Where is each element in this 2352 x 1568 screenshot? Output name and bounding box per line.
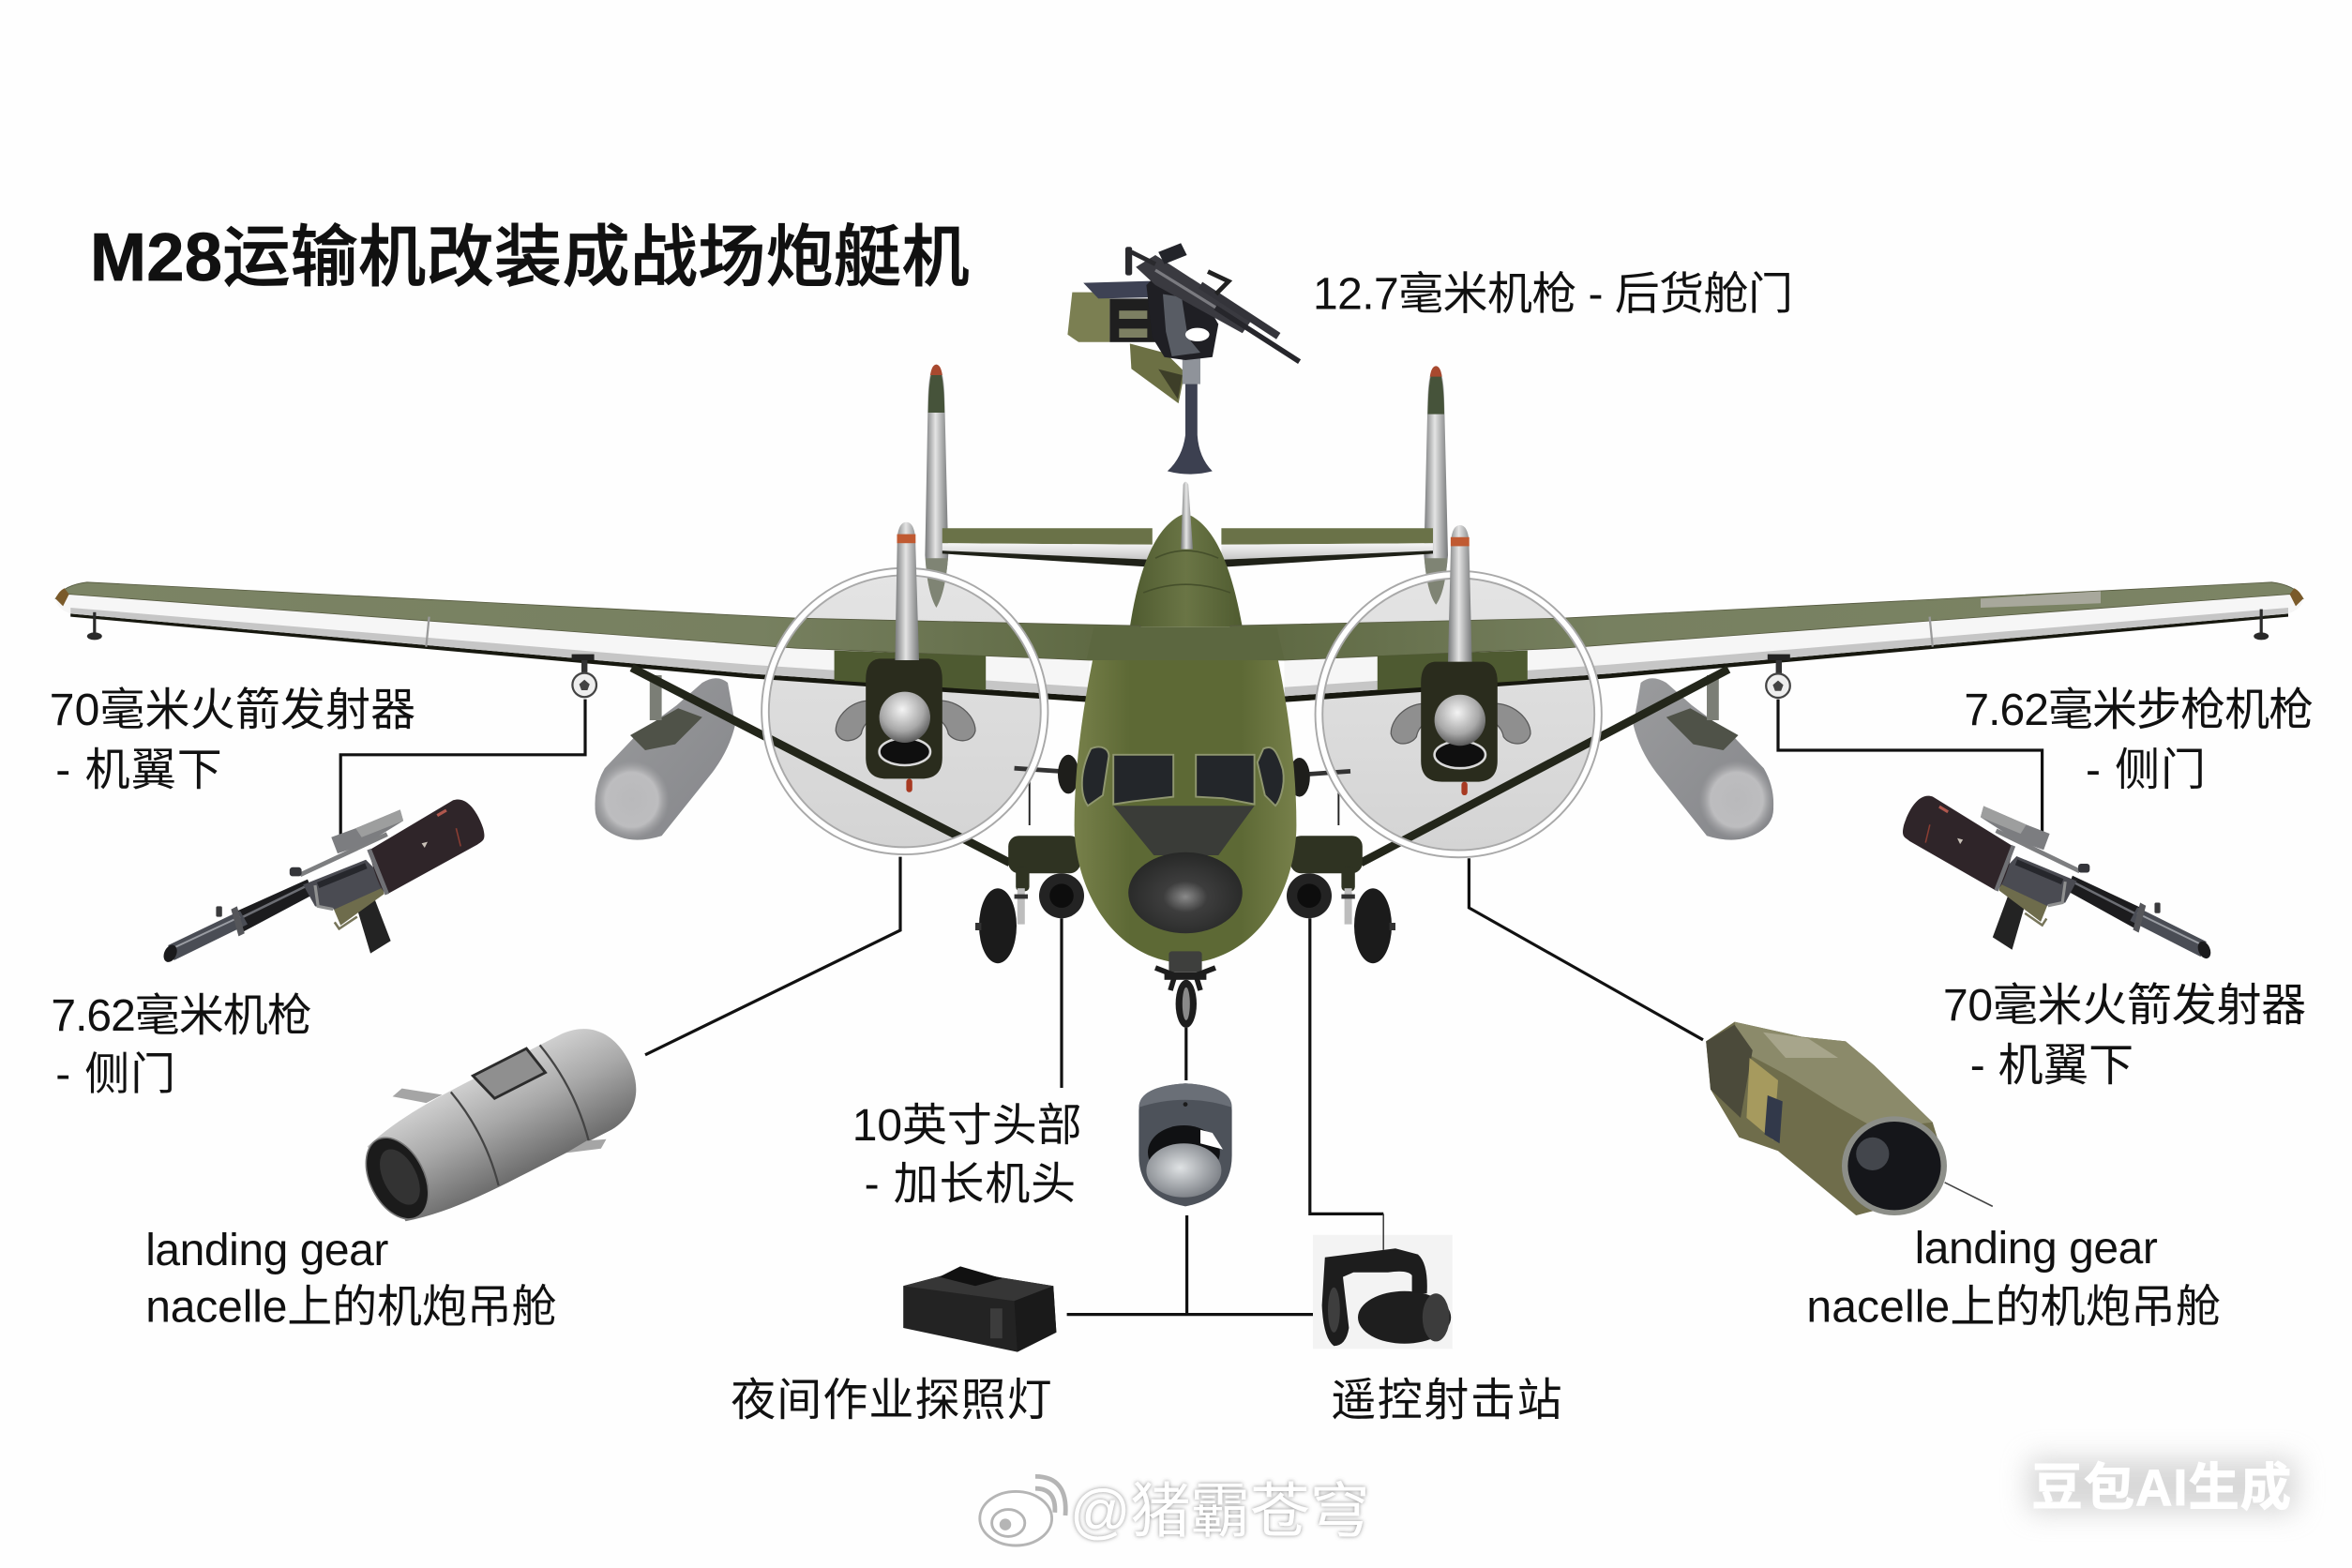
twin tail fins <box>925 365 1448 608</box>
label: right rocket launcher: - 机翼下 <box>1970 1041 2133 1091</box>
watermark: weibo: @猪霸苍穹 <box>1070 1478 1370 1545</box>
label: right 7.62mm gun: - 侧门 <box>2086 746 2206 795</box>
wing struts <box>632 668 1728 863</box>
icon: right launcher <box>1903 796 2213 960</box>
dorsal fin <box>1181 482 1193 550</box>
icon: left launcher <box>161 799 484 964</box>
propeller disc left <box>767 573 1043 850</box>
label: right rocket launcher: 70毫米火箭发射器 <box>1943 981 2306 1031</box>
main fuselage <box>1075 655 1296 963</box>
label: left landing gear pod: nacelle上的机炮吊舱 <box>145 1283 557 1333</box>
label: nose turret: 10英寸头部 <box>852 1101 1082 1151</box>
horizontal stabilizer <box>942 528 1433 567</box>
label: searchlight: 夜间作业探照灯 <box>731 1376 1052 1425</box>
icon: night searchlight <box>903 1266 1056 1352</box>
label: right landing gear pod: nacelle上的机炮吊舱 <box>1806 1283 2221 1333</box>
label: right 7.62mm gun <box>1964 686 2314 795</box>
label: remote weapon station: 遥控射击站 <box>1331 1376 1562 1425</box>
nose gear <box>1155 951 1215 1028</box>
label: left landing gear pod: landing gear <box>145 1226 388 1275</box>
label: right landing gear pod <box>1806 1224 2221 1333</box>
aircraft <box>55 365 2303 1028</box>
engine upper fin right <box>1448 525 1472 662</box>
radome <box>1128 852 1243 933</box>
label: left rocket launcher <box>50 686 415 795</box>
label: left 7.62mm gun <box>51 991 312 1100</box>
label: left landing gear pod <box>145 1226 557 1333</box>
icon: right camouflaged gun pod <box>1706 1022 1993 1215</box>
rear fuselage hump <box>1130 513 1243 627</box>
right wing <box>1230 582 2303 702</box>
label: nose turret <box>852 1101 1082 1209</box>
watermark: AI label: 豆包AI生成 <box>2031 1459 2291 1516</box>
label: left 7.62mm gun: - 侧门 <box>55 1050 175 1100</box>
label: nose turret: - 加长机头 <box>865 1159 1076 1209</box>
wingtip stands <box>87 610 2269 640</box>
underwing pod right <box>1634 675 1774 840</box>
side door guns <box>1015 755 1350 825</box>
underwing pod left <box>595 675 735 840</box>
label: left rocket launcher: 70毫米火箭发射器 <box>50 686 415 735</box>
label: 12.7mm machine gun: 12.7毫米机枪 - 后货舱门 <box>1313 270 1793 320</box>
icon: 12.7mm machine gun on pedestal <box>1067 243 1300 475</box>
engine right <box>1391 662 1530 795</box>
propeller ring left <box>765 572 1045 851</box>
left wing <box>55 582 1140 702</box>
cockpit windows <box>1082 746 1284 806</box>
connector lines <box>340 700 2043 1315</box>
label: right 7.62mm gun: 7.62毫米步枪机枪 <box>1964 686 2314 735</box>
anti-glare panel <box>1113 806 1255 855</box>
icon: weibo logo <box>980 1476 1065 1545</box>
label: right landing gear pod: landing gear <box>1915 1224 2158 1274</box>
engine upper fin left <box>895 522 919 660</box>
wing root top <box>1086 627 1285 660</box>
engine left <box>836 658 975 792</box>
main wheels <box>975 888 1395 963</box>
propeller ring right <box>1319 575 1598 853</box>
pylon fittings <box>572 655 1790 698</box>
icon: left silver gun pod <box>338 991 658 1249</box>
nacelle cannons <box>1039 873 1332 918</box>
title: M28运输机改装成战场炮艇机 <box>90 220 970 295</box>
label: left rocket launcher: - 机翼下 <box>55 746 222 795</box>
icon: remote weapon station <box>1313 1214 1453 1349</box>
label: left 7.62mm gun: 7.62毫米机枪 <box>51 991 312 1041</box>
propeller disc right <box>1320 576 1596 852</box>
icon: nose camera turret <box>1138 1083 1232 1206</box>
label: right rocket launcher <box>1943 981 2306 1091</box>
sponsons <box>1008 836 1363 891</box>
